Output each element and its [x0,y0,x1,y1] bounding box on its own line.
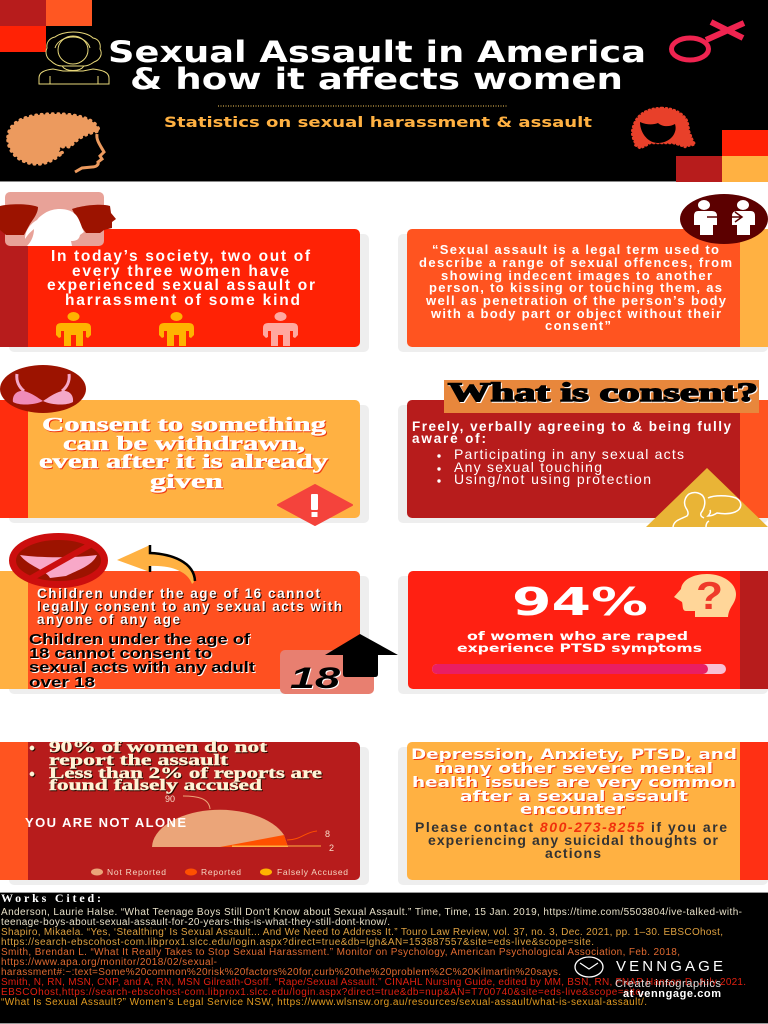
watermark: venngage: at venngage.com [623,988,721,1000]
text block: Any sexual touching [454,459,602,475]
panel: today's society [0,192,369,352]
stat: 94% [512,580,648,624]
legend: Reported [201,867,241,877]
watermark: venngage [575,957,723,1000]
icon: prohibited underwear [12,536,104,584]
text block: health issues are very common [412,775,736,791]
citations: https://search-ebscohost-com.libprox1.slcc.edu/login.aspx?direct=true&db=lgh&AN=153887557&site=eds-live&scope=site. [1,937,594,948]
text block [30,739,322,794]
half pie chart [152,794,334,853]
text block: experienced sexual assault or [47,277,315,294]
citations: EBSCOhost,https://search-ebscohost-com.libprox1.slcc.edu/login.aspx?direct=true&db=nup&AN=T700740&site=eds-live&scope=site. [1,987,644,998]
icon: bra [0,365,86,413]
icon: three heads [0,192,116,246]
citations: Smith, N, RN, MSN, CNP, and A, RN, MSN Gilreath-Osoff. “Rape/Sexual Assault.” CINAHL Nursing Guide, edited by MM, BSN, RN, FNAP Hanson D, July 2021. [1,977,746,988]
hotline text: experiencing any suicidal thoughts or [428,832,719,848]
panel: what is consent [398,378,768,527]
text block [411,747,737,818]
title: Sexual Assault in America [108,35,646,69]
text block: In today’s society, two out of [51,248,311,265]
text block: 90% of women do not [49,739,268,756]
panel: works cited [0,891,768,1024]
progress bar [432,664,726,674]
text block [47,248,315,309]
text block: under 16: Children under the age of 16 cannot [37,586,321,601]
half pie chart: 8 [325,829,330,839]
panel: consent withdrawn [0,365,369,525]
text block: under 18: sexual acts with any adult [29,659,255,676]
icon: warning diamond [278,485,352,525]
text block: many other severe mental [434,761,713,777]
icon: red curly hair [632,108,695,148]
text block: under 16: anyone of any age [37,612,180,627]
title [108,35,646,96]
text block [419,242,732,333]
text block: well as penetration of the person’s body [425,293,727,308]
legend: Not Reported [107,867,166,877]
text block: aware of: [412,431,486,446]
text block: Participating in any sexual acts [454,446,684,462]
text block: Depression, Anxiety, PTSD, and [411,747,737,763]
icon: person 3 [263,312,298,346]
text block: consent” [545,318,611,333]
watermark: venngage: Create infographics [615,978,722,990]
text block: of women who are raped [467,629,688,643]
text block: given [150,471,223,493]
icon: two people arrow [680,194,768,244]
text block: report the assault [49,752,229,769]
text block: under 18 [29,631,255,691]
icon: head with question mark [674,574,736,618]
icon: head with question mark: ? [696,575,723,618]
icon: person 1 [56,312,91,346]
text block: under 16 [37,586,342,627]
text block [39,414,328,493]
text block: encounter [520,802,625,818]
text block: under 18: over 18 [29,674,95,691]
legend [91,867,348,877]
text block: under 18: Children under the age of [29,631,251,648]
icon: person 2 [159,312,194,346]
text block: after a sexual assault [460,789,688,805]
panel: 94 percent [398,571,768,694]
citations: harassment#:~:text=Some%20common%20risk%20factors%20for,curb%20the%20problem%2C%20Kilmartin%20says. [1,967,561,978]
citations: teenage-boys-about-sexual-assault-for-20-years-this-is-what-they-still-dont-know/. [1,917,390,928]
citations: Smith, Brendan L. “What It Really Takes to Stop Sexual Harassment.” Monitor on Psychology, American Psychological Association, Feb. 2018, [1,947,680,958]
text block: Consent to something [42,414,326,436]
text block: describe a range of sexual offences, from [419,255,732,270]
hotline text [415,819,727,861]
icon: 18 box with arrow [280,634,398,695]
panel: mental health [398,742,768,885]
half pie chart: 90 [165,794,175,804]
text block: every three women have [72,263,289,280]
panel: age of consent [0,536,398,695]
callout: YOU ARE NOT ALONE [25,815,186,830]
text block: under 18: 18 cannot consent to [29,645,212,662]
text block: even after it is already [39,451,328,473]
icon: woman outline [39,32,109,84]
text block: with a body part or object without their [430,306,721,321]
text block: Less than 2% of reports are [49,765,322,782]
icon: curved arrow [117,545,195,584]
hotline text: Please contact 800-273-8255 if you are [415,819,727,835]
text block: showing indecent images to another [441,268,712,283]
text block [412,419,731,487]
icon: triangle with speaker [646,468,768,527]
icon: afro woman profile [8,114,104,172]
citations: Shapiro, Mikaela. “Yes, ‘Stealthing’ Is Sexual Assault... And We Need to Address It.” Touro Law Review, vol. 37, no. 3, Dec. 2021, pp. 1–30. EBSCOhost, [1,927,723,938]
icon: female symbol [672,22,744,60]
icon: 18 box with arrow: 18 [290,662,340,695]
hotline text: actions [545,845,601,861]
panel: legal definition [398,194,768,352]
watermark: venngage: VENNGAGE [616,958,723,975]
subtitle: Statistics on sexual harassment & assault [164,115,592,131]
text block: can be withdrawn, [63,433,305,455]
citations: Anderson, Laurie Halse. “What Teenage Boys Still Don't Know about Sexual Assault.” Time, Time, 15 Jan. 2019, https://time.com/5503804/ive-talked-with- [1,907,742,918]
text block: Freely, verbally agreeing to & being fully [412,419,731,434]
half pie chart: 2 [329,843,334,853]
citations [1,907,746,1008]
title: & how it affects women [130,62,623,96]
text block [457,629,702,655]
citations: “What Is Sexual Assault?” Women's Legal Service NSW, https://www.wlsnsw.org.au/resources/sexual-assault/what-is-sexual-assault/. [1,997,647,1008]
heading: Works Cited: [1,891,101,905]
citations: https://www.apa.org/monitor/2018/02/sexual- [1,957,217,968]
heading [444,378,759,413]
text block: Using/not using protection [454,471,651,487]
header band [0,0,768,182]
legend: Falsely Accused [277,867,348,877]
panel: reporting chart [0,739,369,885]
text block: “Sexual assault is a legal term used to [432,242,719,257]
text block: harrassment of some kind [65,292,300,309]
text block: person, to kissing or touching them, as [429,280,722,295]
text block: found falsely accused [49,777,262,794]
text block: under 16: legally consent to any sexual acts with [37,599,342,614]
heading: What is consent? [448,378,758,407]
text block: experience PTSD symptoms [457,641,702,655]
